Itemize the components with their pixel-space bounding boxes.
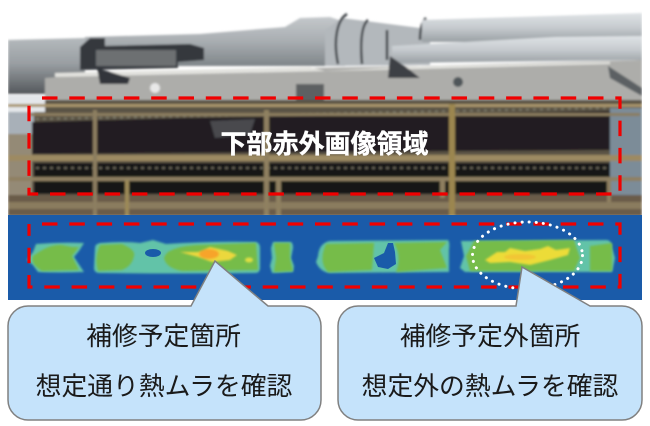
left edge background [8, 134, 32, 199]
blob 1 halo [27, 243, 84, 272]
left insulated pipe [8, 38, 85, 94]
cold spot right [374, 243, 396, 269]
hot core left [199, 249, 219, 259]
left white pipe end [8, 95, 45, 112]
blob 5 end green [590, 243, 612, 271]
cold spots [145, 243, 396, 269]
right upper pipe [422, 13, 642, 42]
upper middle pipe [85, 17, 345, 66]
blob 4 middle green [394, 242, 447, 272]
post c [264, 110, 269, 216]
right side grey wall [610, 108, 642, 196]
green blobs [32, 240, 612, 272]
title: lower infrared image area: 下部赤外画像領域 [220, 129, 429, 159]
bracket left [97, 68, 130, 84]
callout bubble right [338, 267, 642, 420]
callout left line 1: 補修予定箇所 [86, 322, 241, 351]
stair right [608, 66, 642, 96]
lower tube rivets [36, 167, 608, 169]
hot spot left small [245, 258, 253, 262]
yellow hot zone [180, 246, 570, 265]
callout: planned repair location [8, 261, 321, 420]
blob 4 left green [322, 243, 374, 272]
post d [276, 178, 281, 216]
hot zone left [180, 247, 237, 262]
dark machine housing [80, 38, 204, 70]
blob 3 green [274, 243, 293, 272]
post a [93, 110, 97, 216]
cold spot left [145, 249, 161, 257]
left blue grey pipe [8, 112, 34, 134]
bolt fitting right [453, 77, 463, 87]
red dashed frame on photo [29, 98, 620, 194]
callout left line 2: 想定通り熱ムラを確認 [36, 372, 293, 401]
bottom deck [8, 195, 642, 216]
bracket right [388, 56, 420, 78]
callout: outside planned repair location [338, 267, 642, 420]
hot zone right [485, 246, 570, 265]
lower black tube [34, 163, 610, 194]
teal halo blobs [27, 240, 615, 274]
casing top edge highlight [55, 62, 610, 77]
blue thermal background [8, 215, 642, 300]
post g [607, 178, 611, 202]
upper black tube [32, 111, 610, 154]
right lower pipe [392, 36, 642, 63]
upper tube rivets [36, 108, 610, 119]
post f [440, 178, 445, 198]
rail 1 [8, 104, 642, 107]
callout right line 1: 補修予定外箇所 [400, 322, 580, 351]
blob 2 right green [164, 243, 258, 271]
bolt fitting left [150, 83, 160, 93]
housing interior [96, 50, 176, 66]
blob 1 green [32, 245, 79, 271]
rail 4 [8, 177, 642, 181]
panel: plant photograph [8, 13, 642, 216]
blob 5 green [466, 240, 580, 271]
blob 4 halo [316, 240, 449, 273]
tube highlight [210, 119, 255, 138]
rail 2 [30, 113, 640, 116]
hot core right [504, 254, 536, 260]
panel: infrared thermal image [8, 215, 642, 300]
pipe flange section [325, 18, 430, 66]
post e [449, 104, 455, 216]
rail 3 [8, 155, 642, 161]
blob 2 halo [94, 240, 260, 274]
flange dark rings [336, 14, 426, 64]
callout right line 2: 想定外の熱ムラを確認 [362, 372, 619, 401]
dark casing recess [296, 84, 324, 102]
blob 3 halo [270, 242, 294, 273]
callout bubble left [8, 261, 321, 420]
rail 5 [8, 202, 642, 209]
red dashed frame on infrared image [29, 224, 620, 287]
lower structure background [30, 98, 642, 197]
handrails [8, 104, 642, 216]
white dotted ellipse around unexpected heat spot [472, 222, 582, 289]
grey equipment casing [45, 60, 642, 100]
blob 2 left green [96, 244, 134, 271]
post b [125, 180, 129, 216]
blob 5 halo [460, 240, 615, 272]
